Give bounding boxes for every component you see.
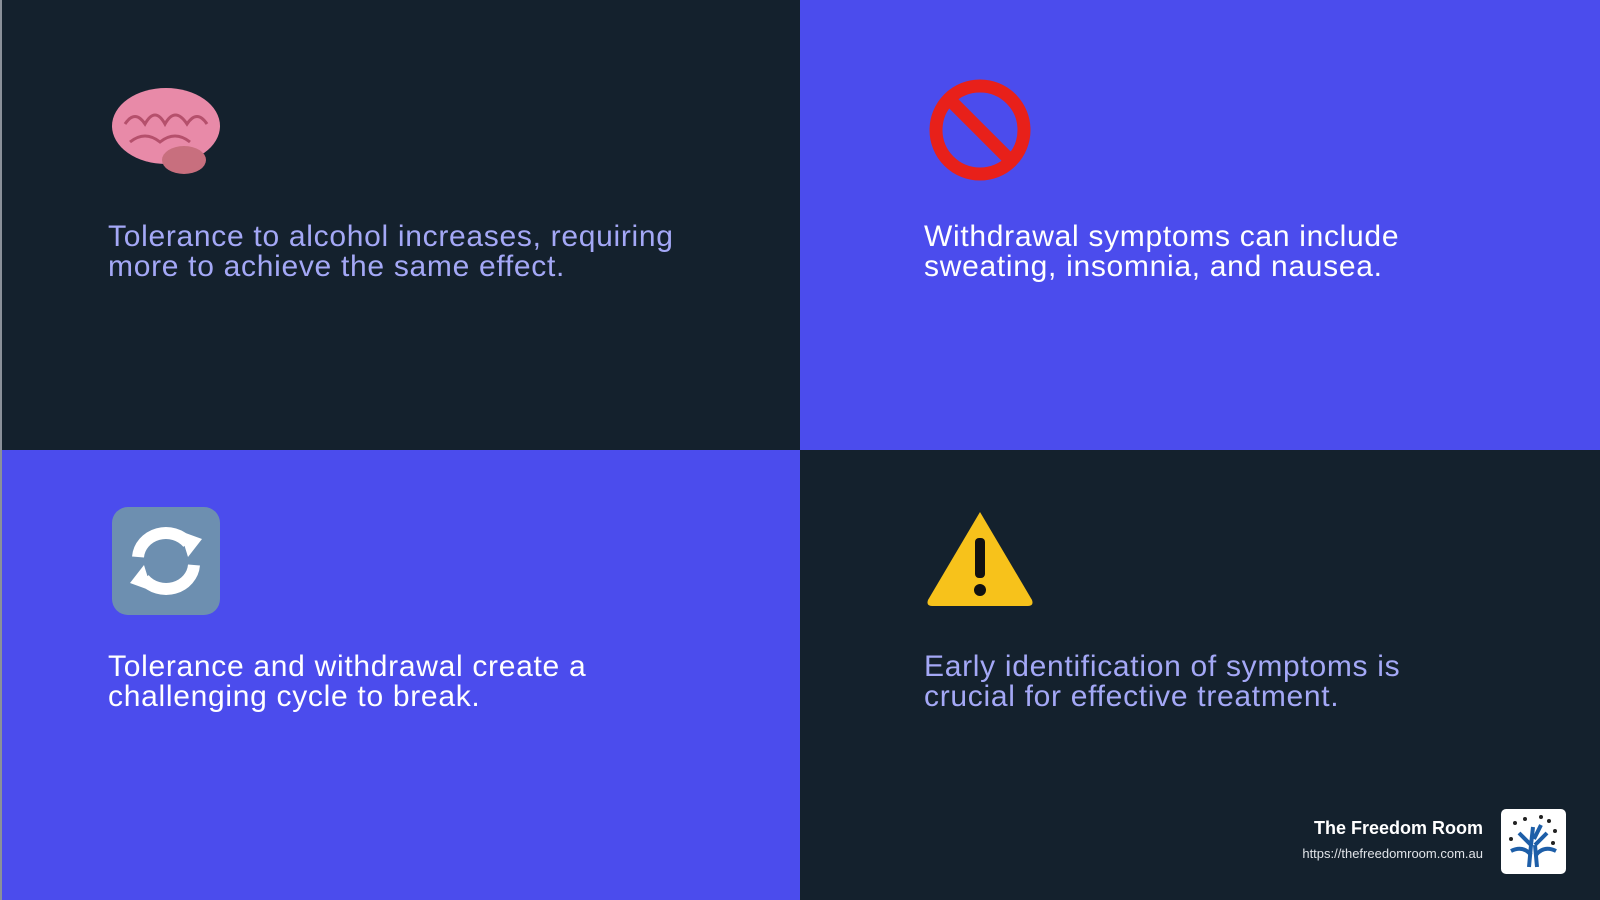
icon: cycle arrows: [112, 507, 220, 615]
panel: early identification: [800, 450, 1600, 900]
panel: cycle: [0, 450, 800, 900]
text: withdrawal: sweating, insomnia, and nausea.: [924, 250, 1383, 283]
icon: warning: [928, 512, 1032, 606]
brand url: https://thefreedomroom.com.au: [1302, 846, 1483, 861]
icon: brain: [112, 88, 220, 174]
text: early identification: crucial for effective treatment.: [924, 680, 1339, 713]
panel: tolerance: [0, 0, 800, 450]
text: cycle: [108, 650, 586, 713]
icon: prohibited: [930, 80, 1030, 180]
text: early identification: [924, 650, 1400, 713]
text: early identification: Early identification of symptoms is: [924, 650, 1400, 683]
logo: [1501, 809, 1566, 874]
brand footer: [1302, 809, 1566, 874]
text: tolerance: [108, 220, 674, 283]
text: tolerance: Tolerance to alcohol increases, requiring: [108, 220, 674, 253]
brand name: The Freedom Room: [1314, 818, 1483, 838]
text: withdrawal: [924, 220, 1399, 283]
text: cycle: Tolerance and withdrawal create a: [108, 650, 586, 683]
text: cycle: challenging cycle to break.: [108, 680, 480, 713]
text: tolerance: more to achieve the same effect.: [108, 250, 565, 283]
text: withdrawal: Withdrawal symptoms can include: [924, 220, 1399, 253]
panel: withdrawal: [800, 0, 1600, 450]
